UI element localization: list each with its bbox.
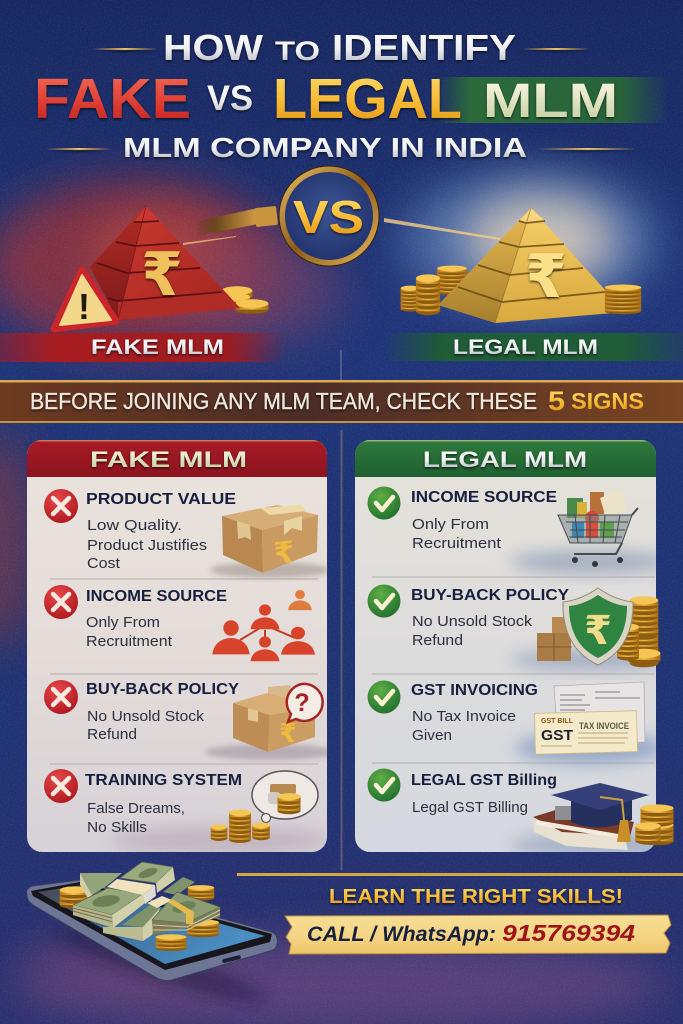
row: training system: TRAINING SYSTEM [85,772,242,789]
magnifying glass: VS [293,191,364,243]
coins beside gold pyramid left [401,266,467,315]
row: income source [44,585,315,661]
heading line: how to identify: HOW [163,27,263,68]
contact ribbon: 915769394 [502,920,635,946]
heading line: fake vs legal mlm: FAKE [34,67,191,131]
label: fake mlm: FAKE MLM [91,335,224,359]
icon: green check [368,680,400,714]
row: gst invoicing [368,680,645,754]
icon: coin stacks [211,809,270,843]
row: training system [44,769,318,843]
coins on phone [60,885,219,951]
heading line: how to identify: IDENTIFY [332,27,516,68]
icon: red cross [44,680,78,714]
row: gst invoicing: Given [412,727,452,744]
icon: red cross [44,585,78,619]
icon: green shield with rupee [563,588,633,665]
icon: thought bubble of coins [252,771,318,822]
row: buy-back policy [44,680,323,752]
icon: tax invoice sheets [534,682,645,754]
row: legal gst billing: Legal GST Billing [412,799,528,816]
row: income source: Only From [86,614,160,631]
panel: legal mlm [355,440,683,857]
header text: LEGAL MLM [423,447,587,472]
icon: warning triangle: ! [78,286,90,327]
row: buy-back policy: Refund [412,632,463,649]
row: product value: PRODUCT VALUE [86,491,236,508]
icon: tax invoice sheets: TAX INVOICE [579,721,629,732]
gold legal pyramid [401,208,641,323]
icon: rupee on gold pyramid: ₹ [525,242,567,312]
row: product value [44,489,318,573]
row: buy-back policy: BUY-BACK POLICY [411,587,570,604]
divider: gold line [237,873,683,876]
row: product value: Product Justifies [87,537,207,554]
icon: phone with money [27,862,277,1012]
row: income source: Recruitment [86,633,173,650]
row: buy-back policy: Refund [87,726,137,743]
row: legal gst billing [368,768,674,850]
heading line: fake vs legal mlm: VS [207,79,253,118]
row: training system: No Skills [87,819,147,836]
icon: cardboard box with rupee [222,505,318,573]
icon: tax invoice sheets: GST [541,727,573,744]
heading line: how to identify: TO [275,36,320,66]
heading line: mlm company in india: MLM COMPANY IN INDIA [123,132,527,163]
row: income source: Only From [412,516,489,533]
icon: green shield with rupee: ₹ [584,608,612,654]
icon: warning triangle [54,270,116,329]
row: buy-back policy: No Unsold Stock [412,613,533,630]
row: buy-back policy: No Unsold Stock [87,708,205,725]
icon: box with question bubble: ₹ [279,719,297,749]
icon: rupee on red pyramid: ₹ [141,240,183,310]
icon: green check [368,486,400,520]
icon: boxes behind shield [537,617,572,661]
icon: green check [368,768,400,802]
icon: coin stacks beside books [635,804,674,845]
contact ribbon: CALL / WhatsApp: [307,923,496,946]
row: buy-back policy: BUY-BACK POLICY [86,681,240,698]
label: fake mlm [0,333,285,362]
icon: shopping cart [558,490,638,567]
banner: five signs: SIGNS [571,388,644,414]
panel: fake mlm [27,440,335,854]
heading line: fake vs legal mlm [34,67,618,131]
row: buy-back policy [368,584,660,667]
label: legal mlm [383,333,683,361]
label: legal mlm: LEGAL MLM [453,335,598,359]
light ray to legal pyramid [384,218,500,240]
call to action: learn the right skills: LEARN THE RIGHT SKILLS! [329,885,623,908]
contact ribbon [285,915,671,954]
row: gst invoicing: No Tax Invoice [412,708,516,725]
panel header [27,440,327,477]
icon: box with question bubble [233,684,323,752]
coins beside red pyramid [222,286,268,314]
cash stacks [73,862,220,941]
row: gst invoicing: GST INVOICING [411,682,538,699]
heading line: how to identify [92,27,590,68]
row: income source: Recruitment [412,535,502,552]
banner: five signs [0,380,683,423]
icon: red cross [44,769,78,803]
row: income source: INCOME SOURCE [411,489,557,506]
icon: books and graduation cap [533,783,649,850]
heading line: fake vs legal mlm: LEGAL [273,67,462,131]
title [34,27,668,163]
banner: five signs: 5 [548,386,565,416]
banner: five signs: BEFORE JOINING ANY MLM TEAM, CHECK THESE [30,388,537,414]
row: training system: False Dreams, [87,800,185,817]
red fake pyramid [90,206,268,320]
row: product value: Low Quality. [87,517,182,534]
icon: cardboard box with rupee: ₹ [272,535,297,572]
heading line: fake vs legal mlm: MLM [483,75,618,128]
icon: red cross [44,489,78,523]
panel header [355,440,656,477]
magnifying glass [183,166,379,266]
speech bubble: ? [294,689,310,717]
row: income source: INCOME SOURCE [86,588,227,605]
row: income source [368,486,638,567]
coins beside gold pyramid right [605,285,641,314]
row: legal gst billing: LEGAL GST Billing [411,772,557,789]
green band behind MLM [436,77,668,123]
icon: coin stacks behind shield [617,596,660,667]
icon: tax invoice sheets: GST BILL [541,718,574,725]
icon: recruitment network [212,590,315,661]
row: product value: Cost [87,555,121,572]
header text: FAKE MLM [90,447,247,472]
icon: green check [368,584,400,618]
